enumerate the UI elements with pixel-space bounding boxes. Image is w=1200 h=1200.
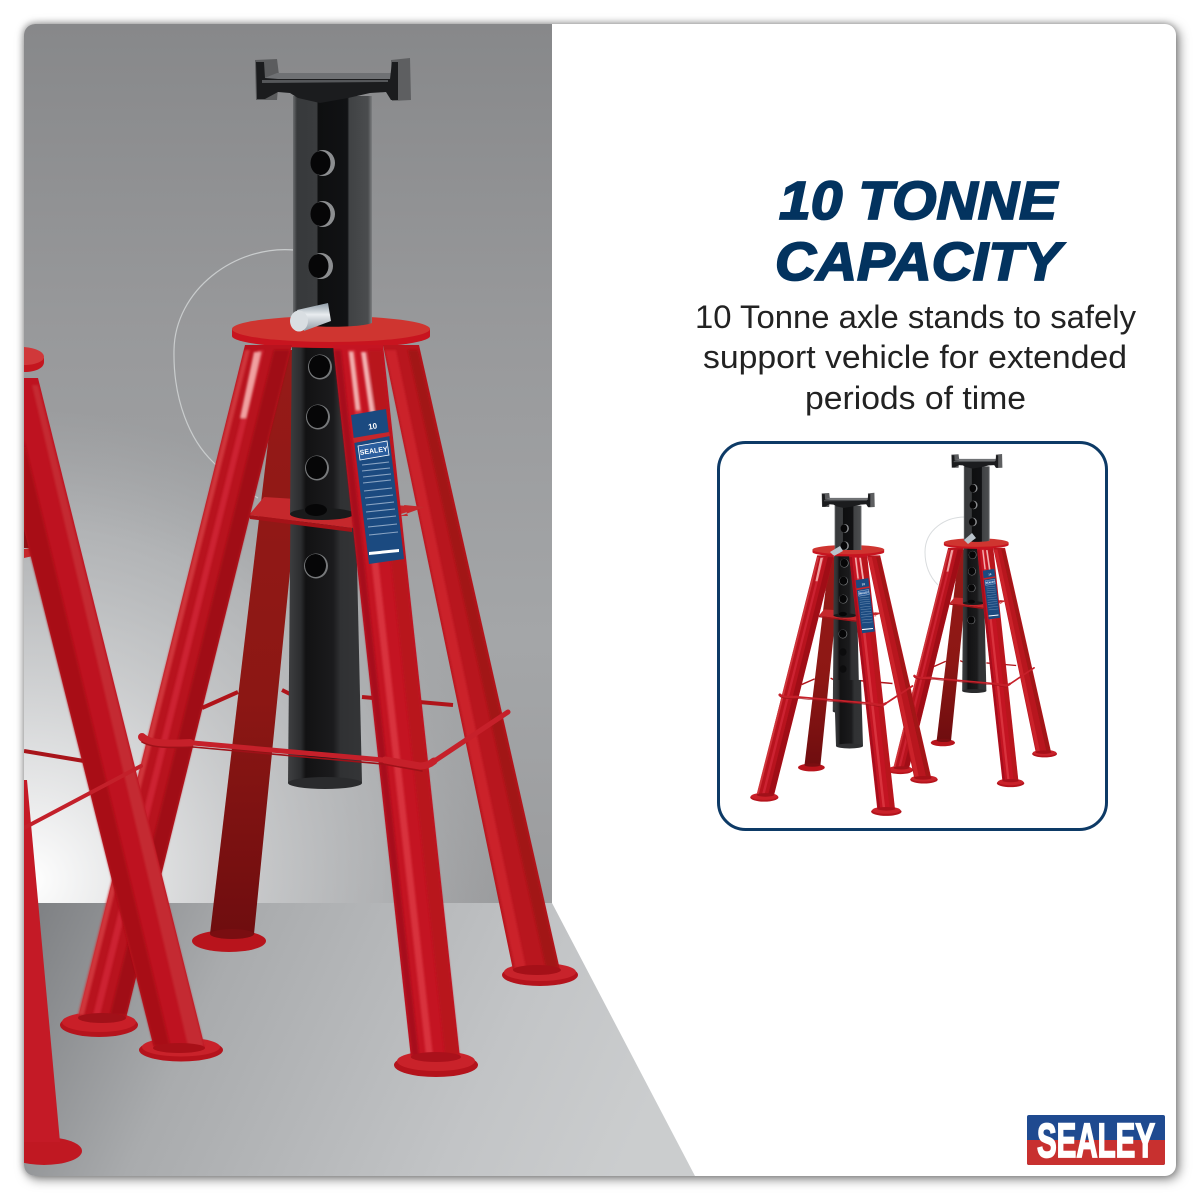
far left leg xyxy=(24,780,82,1165)
ring bar xyxy=(24,766,141,828)
back ring bar xyxy=(24,751,84,761)
main axle stand xyxy=(60,58,578,1077)
inset panel: pair of stands xyxy=(718,442,1106,830)
adjustable column and saddle xyxy=(255,58,411,327)
safety wire xyxy=(174,250,294,498)
heading: CAPACITY xyxy=(775,232,1066,292)
right stand xyxy=(888,454,1057,787)
grey wall backdrop xyxy=(24,24,552,904)
stand rear legs, column base and disc xyxy=(192,316,453,952)
far back leg xyxy=(24,529,29,548)
panel: product photo xyxy=(6,24,695,1176)
inset frame xyxy=(718,442,1106,830)
description text: 10 Tonne axle stands to safely xyxy=(695,299,1136,335)
heading xyxy=(775,171,1066,292)
stand front legs, ring and tag xyxy=(60,345,578,1077)
description text xyxy=(695,299,1136,416)
locking pin xyxy=(290,303,331,332)
left stand xyxy=(750,493,938,816)
disc xyxy=(24,347,44,372)
front leg xyxy=(24,378,223,1062)
left plate piece xyxy=(24,548,31,558)
neighbouring axle stand, cropped at left edge xyxy=(6,347,223,1165)
description text: periods of time xyxy=(805,380,1026,416)
floor xyxy=(24,903,695,1176)
description text: support vehicle for extended xyxy=(703,339,1127,375)
heading: 10 TONNE xyxy=(779,171,1059,231)
